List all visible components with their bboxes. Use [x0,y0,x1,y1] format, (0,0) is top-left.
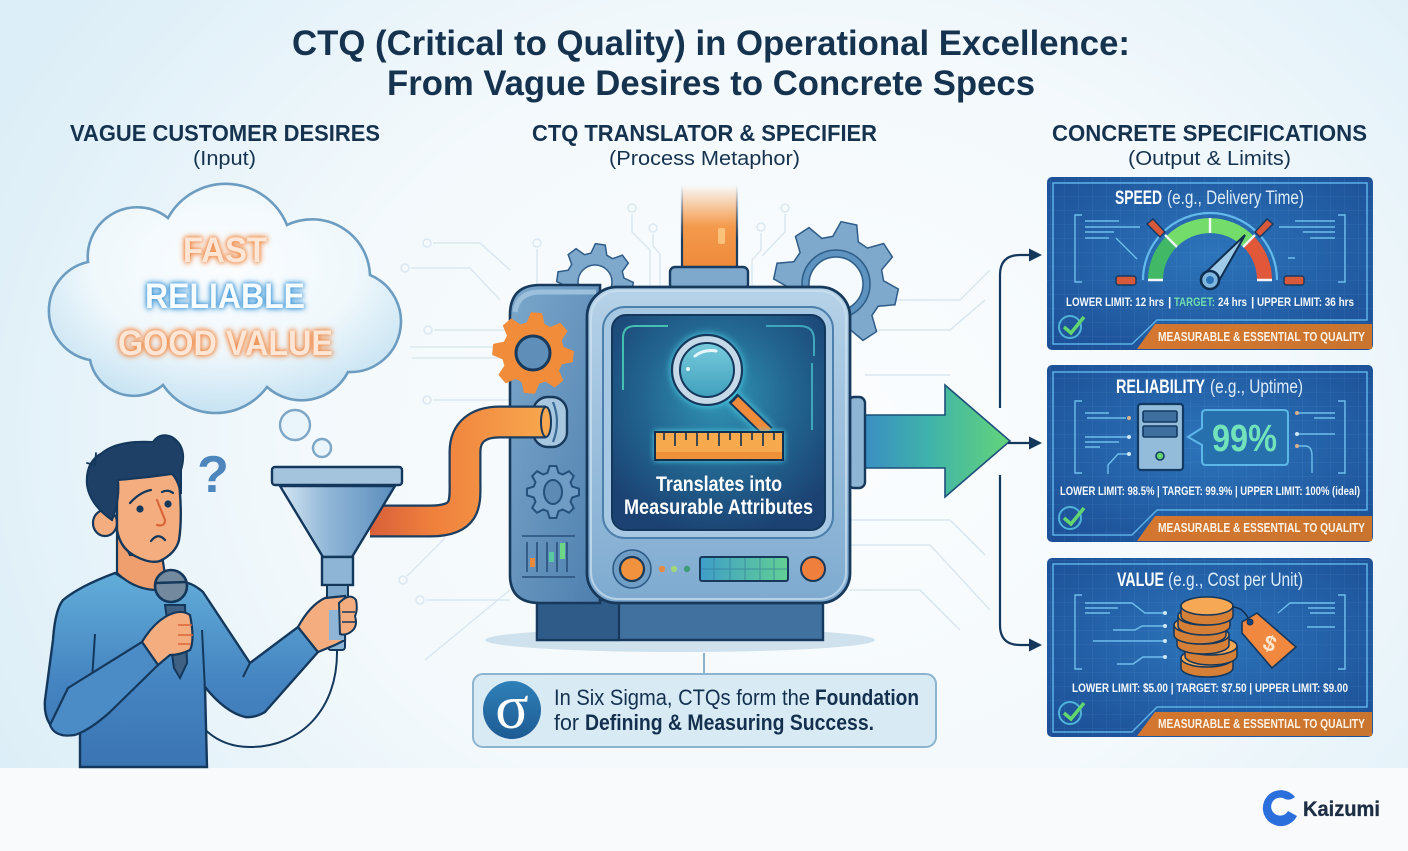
limits: 24 hrs [1218,295,1247,309]
ear [93,510,117,536]
funnel [272,467,402,610]
magnifier icon [672,335,768,432]
output arrow [860,385,1010,497]
card title: (e.g., Delivery Time) [1167,188,1304,209]
card title: RELIABILITY [1116,377,1205,398]
machine front panel [587,287,850,603]
limits: LOWER LIMIT: $5.00 | TARGET: $7.50 | UPPER LIMIT: $9.00 [1072,681,1348,695]
left forearm [50,642,158,736]
title: CTQ (Critical to Quality) in Operational Excellence: [292,24,1130,63]
badge [1137,516,1372,541]
display strip [700,557,788,581]
stop button [801,557,825,581]
fingers [339,597,357,635]
callout connector [703,653,705,674]
indicator lights [659,566,690,572]
card title: SPEED [1115,188,1162,209]
microphone [155,570,187,678]
right hand [298,596,357,652]
icon: coin stack [1174,597,1237,677]
logo: Kaizumi [1303,798,1380,821]
screen caption: Translates into [656,473,782,496]
callout: six sigma [473,674,936,747]
column heading: process [532,120,877,170]
pipe flange [533,397,567,447]
uptime bubble [1188,410,1288,465]
icon: server [1138,404,1183,470]
title: From Vague Desires to Concrete Specs [387,64,1035,103]
gauge [1116,213,1304,289]
screen caption: Measurable Attributes [624,496,813,519]
limits: | [1251,295,1254,309]
machine side body [490,285,600,603]
ruler icon [655,432,783,460]
screen bezel [603,307,833,538]
input pipe top [682,185,737,267]
icon: sigma: σ [495,674,529,742]
screen [612,315,825,530]
screen caption [624,473,813,519]
shirt [45,573,318,767]
person with microphone [45,435,357,767]
cloud word: reliable: RELIABLE [145,277,305,316]
thought bubbles [280,410,331,457]
column heading: process: CTQ TRANSLATOR & SPECIFIER [532,120,877,146]
funnel stem below hand [328,608,345,650]
orange gear [490,310,576,396]
circuit background lines [399,204,990,660]
limits: TARGET: [1174,295,1215,309]
thought cloud [49,184,401,413]
neck [117,530,165,590]
card title [1116,377,1303,398]
connector arrows to cards [1000,248,1042,652]
column heading: process: (Process Metaphor) [609,148,800,170]
icon: check [1059,316,1084,338]
footer band [0,768,1408,851]
column heading: input: (Input) [193,148,256,170]
card: reliability [1047,365,1373,542]
card title: VALUE [1117,570,1164,591]
callout text [554,685,919,735]
column heading: output [1052,120,1367,170]
cable [180,650,337,747]
pipe from funnel to machine [370,407,551,521]
cloud word: good value: GOOD VALUE [118,324,333,363]
icon: check [1059,702,1084,724]
callout text: for [554,710,579,735]
card title [1117,570,1303,591]
limits: | [1168,295,1171,309]
title [292,24,1130,103]
hair [87,435,183,520]
column heading: input: VAGUE CUSTOMER DESIRES [70,120,380,146]
card: speed [1047,177,1373,350]
icon: sigma [483,674,541,742]
column heading: input [70,120,380,170]
back gear small [552,239,638,325]
icon: price tag: $ [1260,630,1280,657]
card title [1115,188,1304,209]
callout text: Defining & Measuring Success. [585,710,874,735]
blueprint detail lines [1075,595,1345,669]
badge [1137,324,1372,349]
mini chart [522,536,575,577]
column heading: output: (Output & Limits) [1128,148,1291,170]
card title: (e.g., Uptime) [1210,377,1303,398]
card: value [1047,558,1373,737]
icon: check [1059,507,1084,529]
uptime bubble: 99% [1212,418,1277,460]
blueprint detail lines [1075,401,1345,474]
callout text: Foundation [815,685,919,710]
icon: price tag [1232,607,1296,668]
logo [1263,790,1380,826]
face [117,472,181,562]
facial features [87,453,173,541]
machine shadow [485,628,875,652]
pipe collar [670,267,748,289]
limits: UPPER LIMIT: 36 hrs [1257,295,1354,309]
callout text: In Six Sigma, CTQs form the [554,685,810,710]
limits [1066,295,1354,309]
question mark: ? [197,446,229,504]
card title: (e.g., Cost per Unit) [1168,570,1303,591]
left hand [142,612,193,665]
side gear outline [527,466,579,518]
cloud word: fast: FAST [183,231,267,270]
machine output collar [848,397,865,488]
control knob [613,550,651,588]
column heading: output: CONCRETE SPECIFICATIONS [1052,120,1367,146]
limits: LOWER LIMIT: 12 hrs [1066,295,1164,309]
machine base [537,600,823,640]
badge [1137,712,1372,736]
back gear large [762,210,910,358]
blueprint detail lines [1075,215,1345,282]
